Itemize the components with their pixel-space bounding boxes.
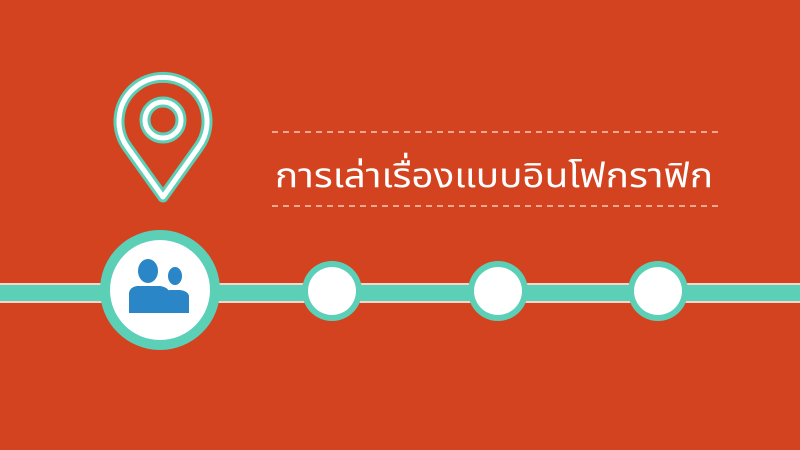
title block: การเล่าเรื่องแบบอินโฟกราฟิก bbox=[275, 152, 713, 195]
timeline node 2 bbox=[302, 261, 362, 321]
timeline node 3 bbox=[468, 261, 528, 321]
timeline node 4 bbox=[628, 261, 688, 321]
timeline node: people (active) bbox=[100, 230, 220, 350]
icon: people bbox=[129, 259, 189, 313]
timeline bar bbox=[0, 283, 800, 303]
icon: location pin bbox=[119, 77, 207, 197]
